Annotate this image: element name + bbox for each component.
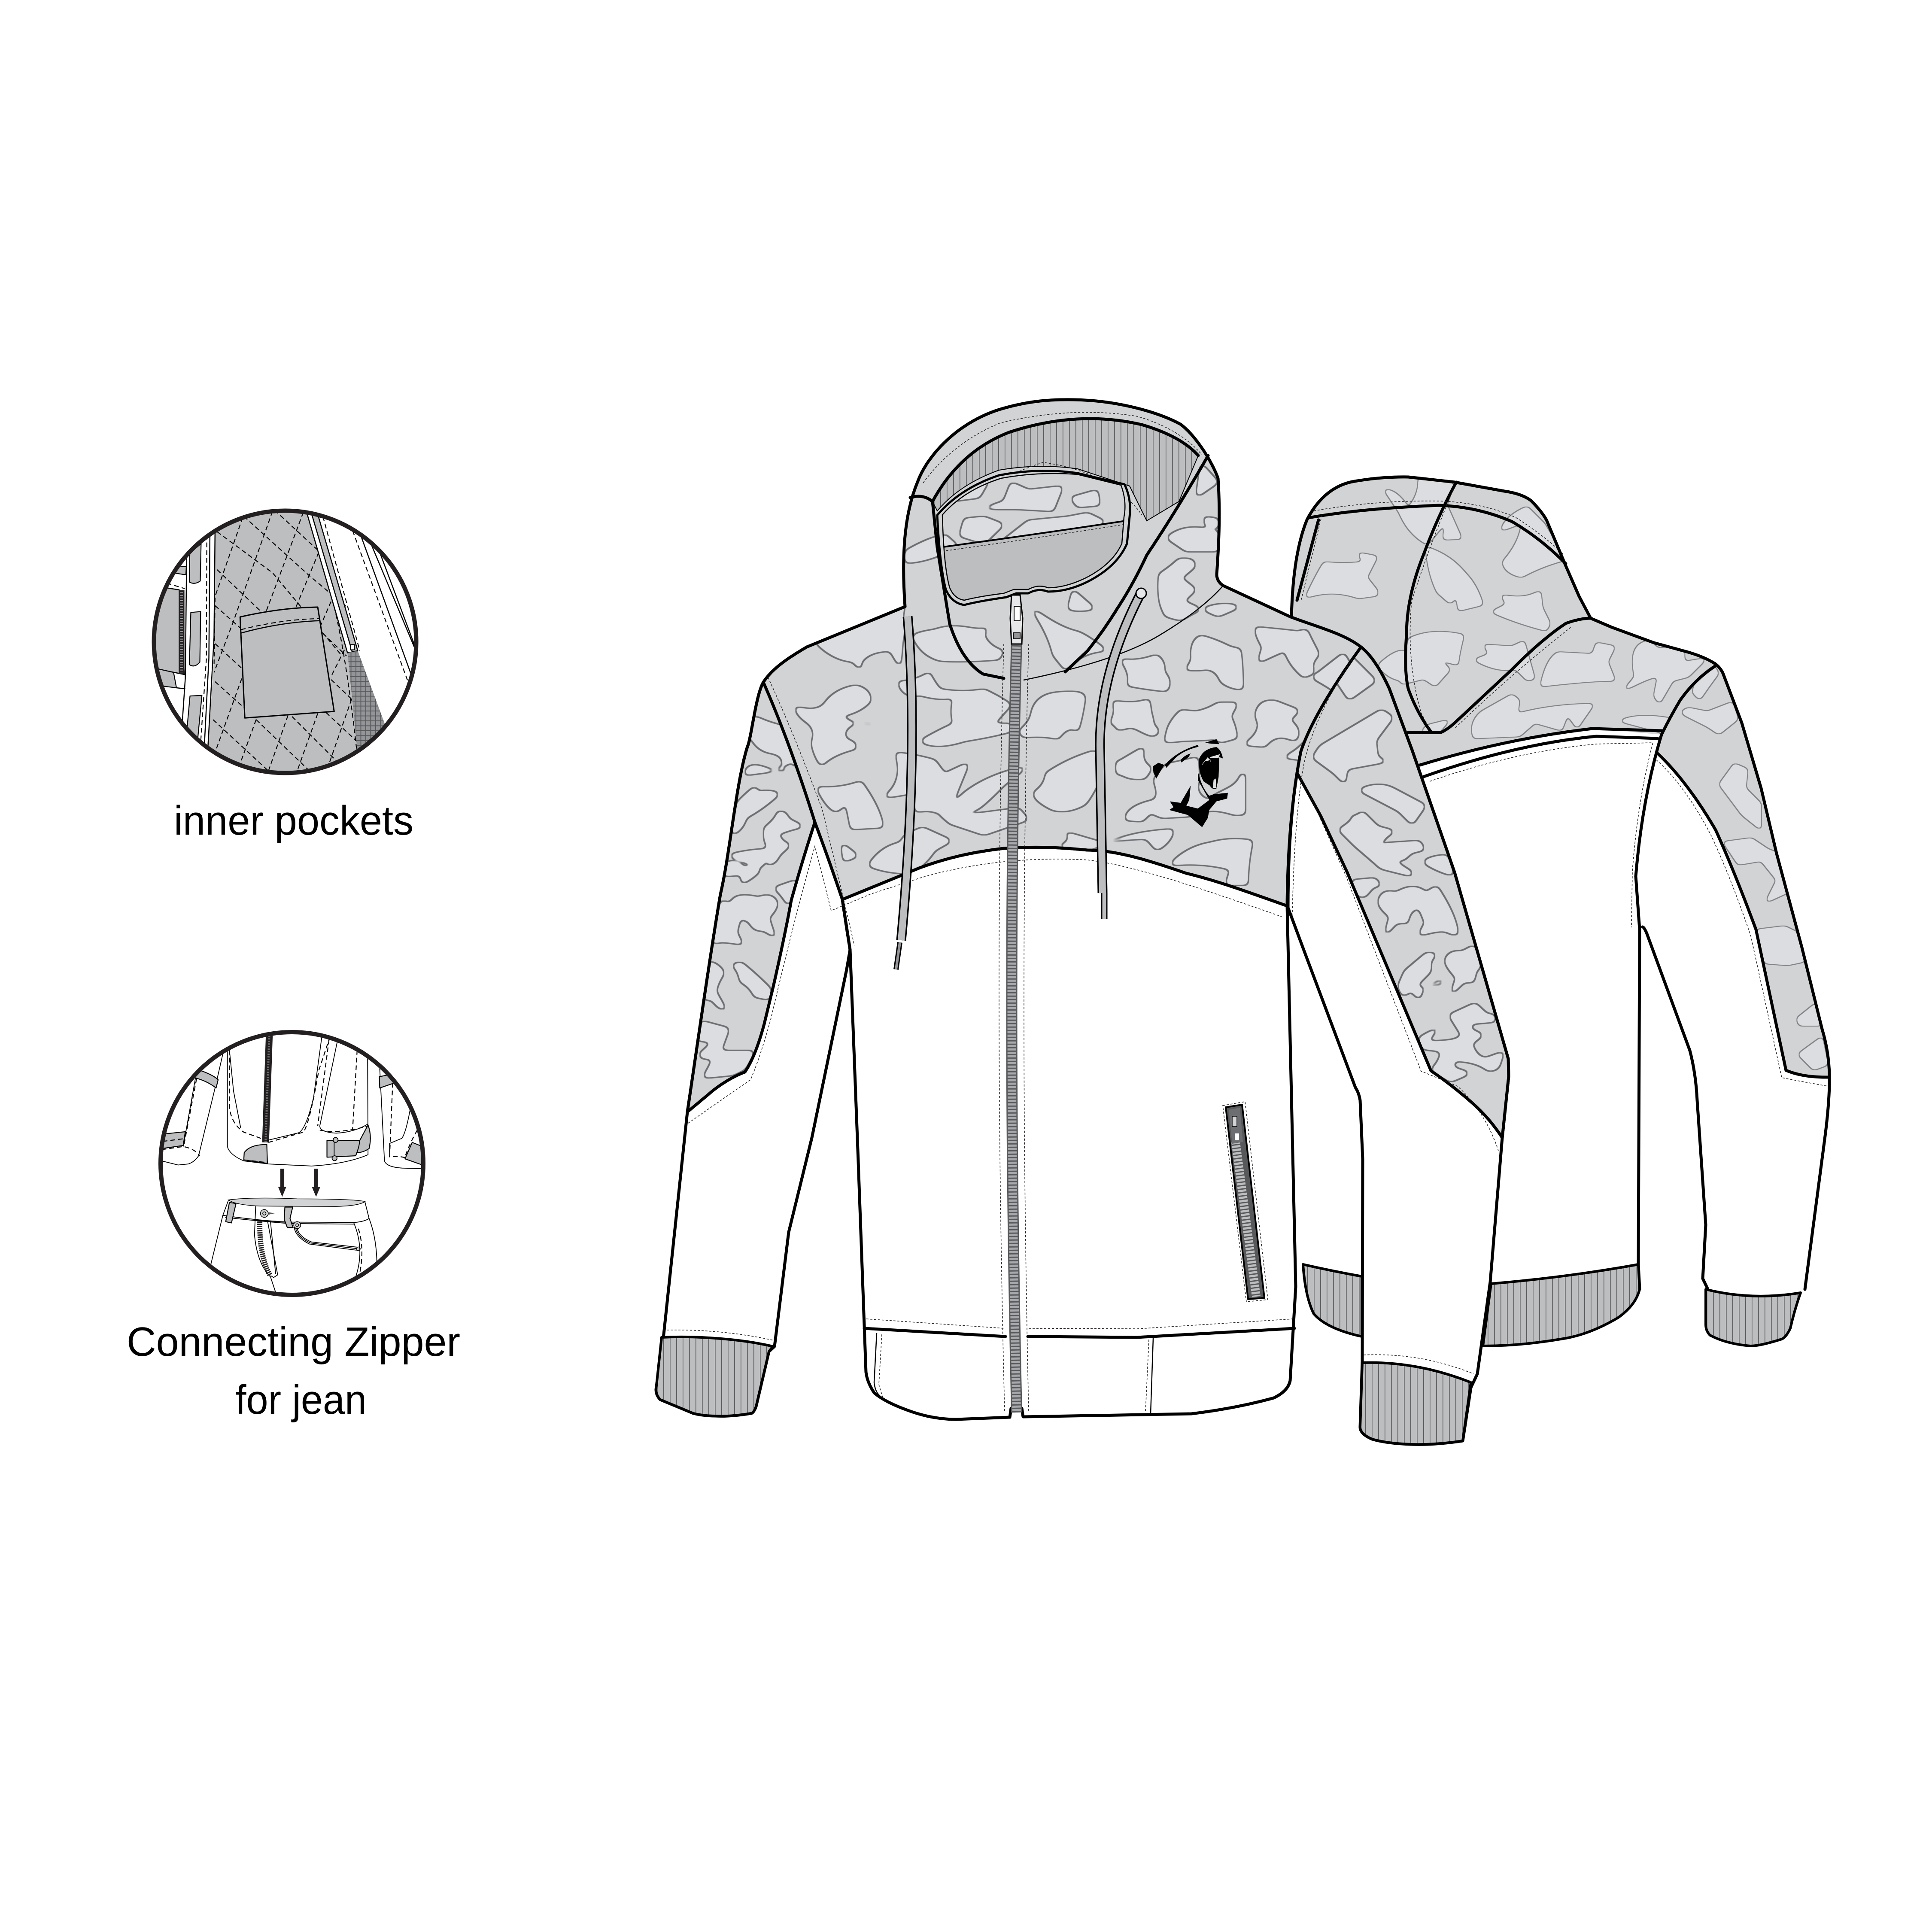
inner pockets drawing	[149, 508, 417, 777]
back jacket hood and yoke	[1288, 477, 1716, 765]
back jacket body and sleeve outlines	[1291, 477, 1829, 1289]
front left cuff	[656, 1330, 774, 1416]
back jacket left hem rib	[1303, 1264, 1362, 1337]
front right sleeve	[1288, 647, 1509, 1444]
back jacket cuff	[1706, 1289, 1801, 1346]
white strip with pads	[182, 531, 215, 748]
left sleeve fragment	[162, 1052, 223, 1165]
hood lining with rib knit	[933, 419, 1198, 521]
hood and chest camo panel	[763, 400, 1393, 906]
connecting zipper circle ring	[161, 1032, 423, 1295]
hood inner rim line	[942, 474, 1125, 600]
detail circle: connecting zipper	[161, 1032, 423, 1295]
front right cuff	[1360, 1355, 1473, 1444]
bear head logo	[1153, 739, 1228, 827]
label: connecting zipper: Connecting Zipper	[127, 1319, 460, 1365]
connecting zipper drawing	[161, 1032, 423, 1295]
jacket hem above	[228, 1048, 368, 1166]
jeans waistband	[228, 1198, 365, 1206]
left gray panel with dark zipper	[149, 585, 184, 674]
raglan seams, outlines and stitching	[687, 400, 1509, 1151]
front body	[842, 847, 1296, 1419]
hem band seams	[864, 1319, 1294, 1414]
label: inner pockets: inner pockets	[174, 798, 413, 844]
hood seams	[910, 412, 1208, 678]
mesh panel	[347, 651, 388, 754]
infographic canvas	[129, 398, 1831, 1446]
right sleeve fragment	[380, 1069, 422, 1169]
detail circle: inner pockets	[149, 508, 417, 777]
label: for jean: for jean	[235, 1377, 367, 1423]
pocket	[240, 607, 334, 718]
back jacket sleeve panel	[1658, 662, 1829, 1077]
right drawstring	[1100, 588, 1146, 919]
left drawstring	[896, 617, 912, 969]
inner pockets circle ring	[154, 511, 416, 773]
front view jacket	[656, 400, 1509, 1444]
hood opening rim	[937, 471, 1130, 605]
hood inner camo and lining	[936, 464, 1133, 609]
front left sleeve	[656, 682, 850, 1416]
arrows pointing down	[278, 1169, 320, 1197]
back jacket hem rib	[1483, 1264, 1640, 1346]
back jacket hood seams	[1297, 482, 1591, 732]
quilt stitching	[213, 510, 358, 772]
main centre zipper	[999, 595, 1029, 1413]
back view jacket	[1288, 477, 1829, 1346]
right sleeve camo panel	[1297, 647, 1509, 1138]
pocket zipper	[1223, 1102, 1268, 1302]
zip and seam lines	[307, 512, 352, 653]
quilted lining	[208, 508, 358, 777]
left sleeve camo panel	[687, 682, 815, 1112]
